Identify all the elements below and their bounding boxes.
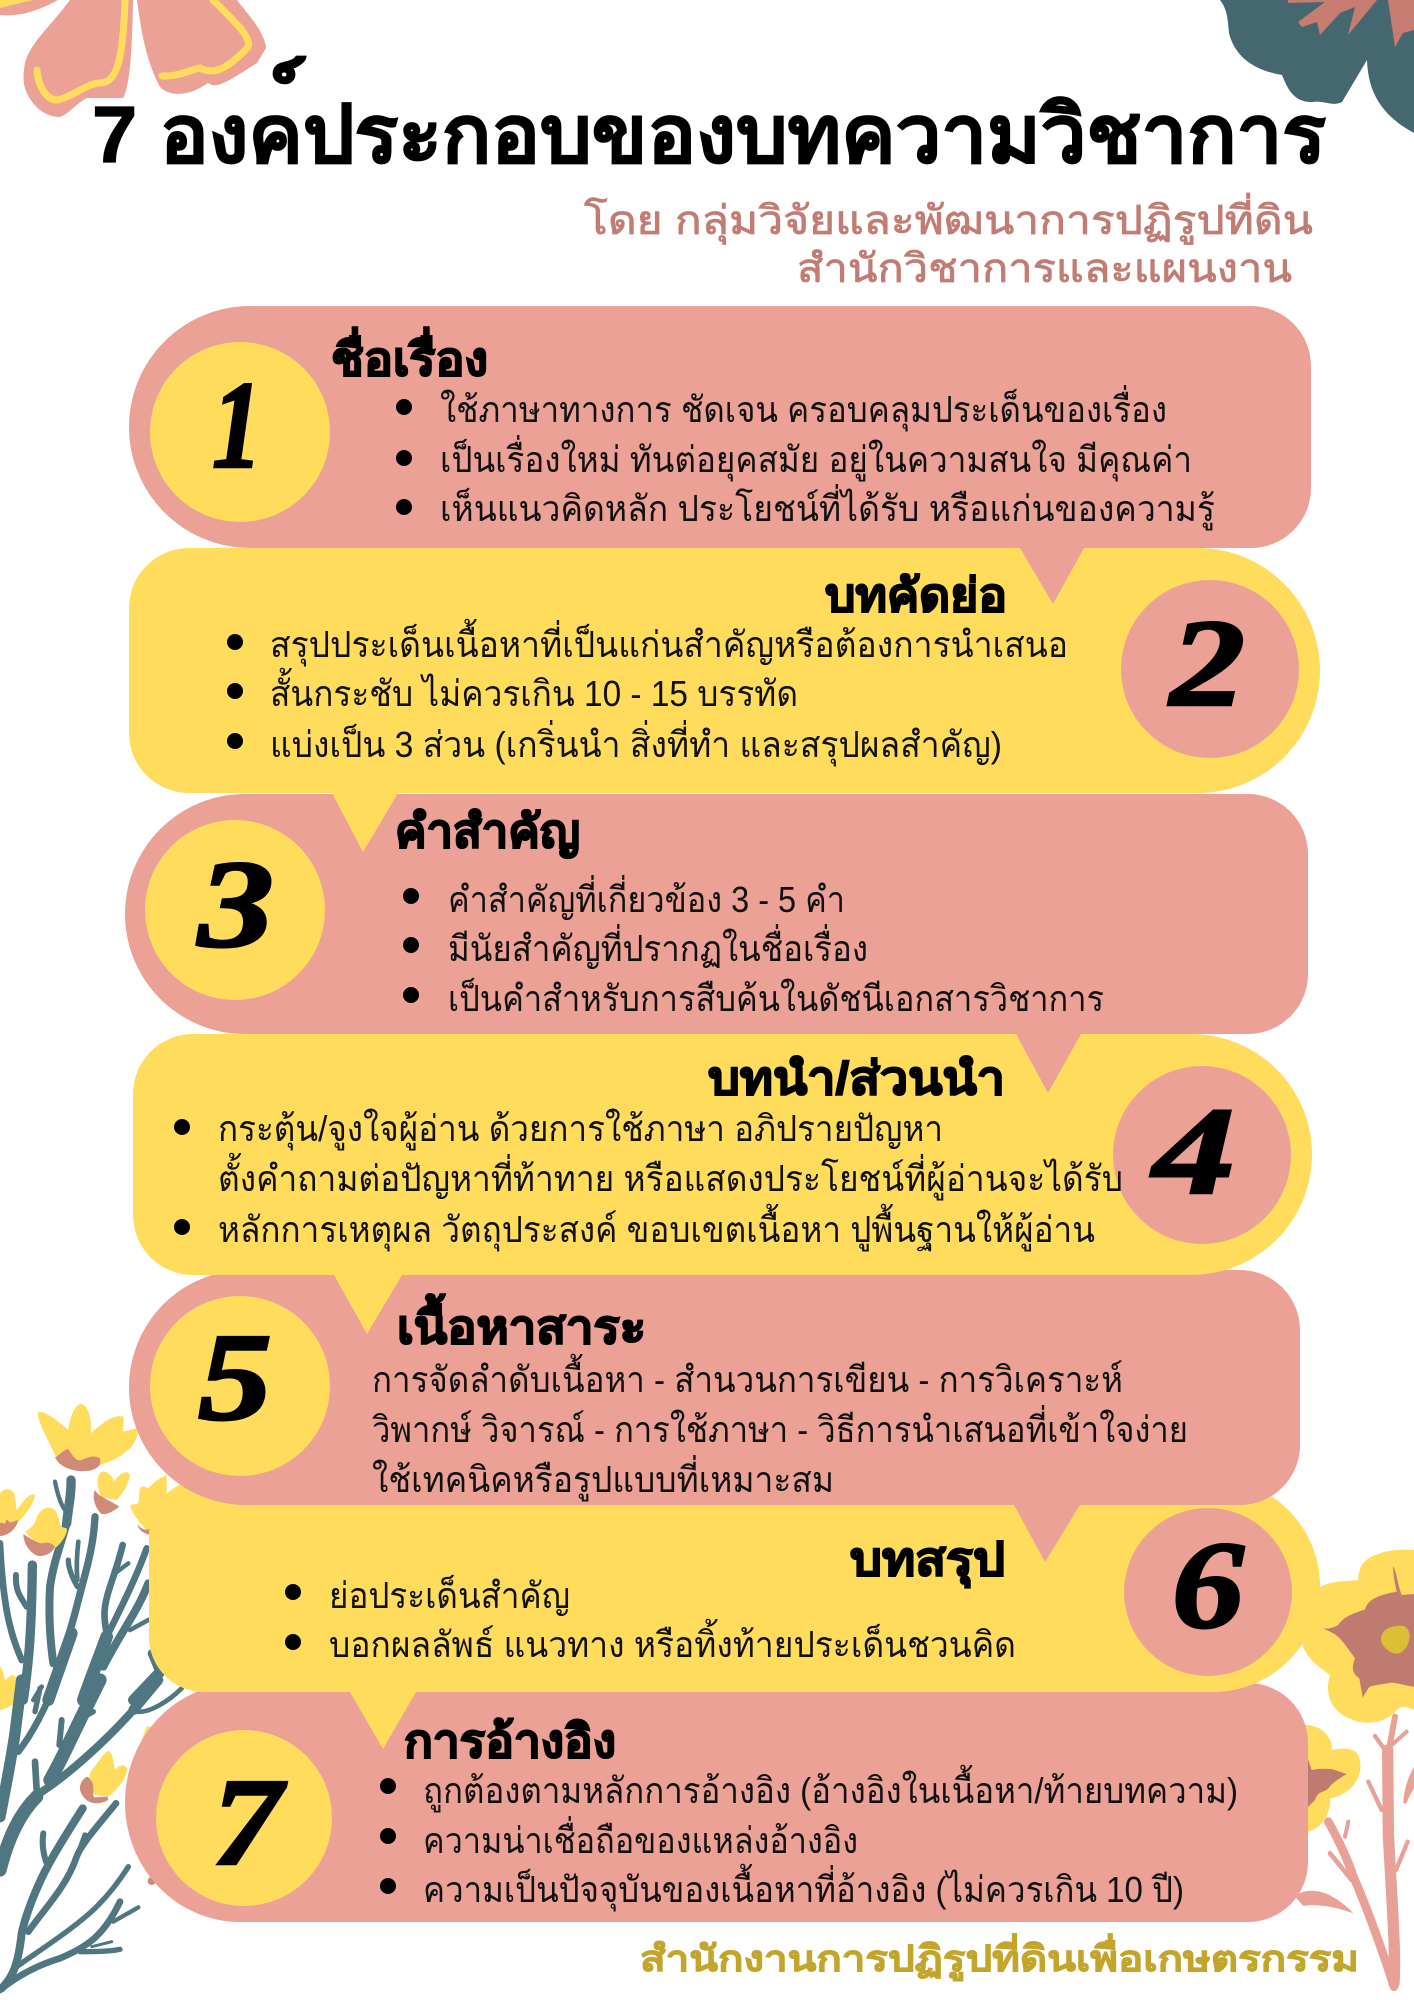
footer: organisation name: สำนักงานการปฏิรูปที่ดินเพื่อเกษตรกรรม [640, 1933, 1359, 1982]
decoration: top-right flower [1220, 0, 1414, 133]
panel 2: abstract: 2 [1168, 595, 1245, 733]
panel 7: references: 7 [212, 1754, 287, 1892]
panel 5: body content [129, 1270, 1300, 1562]
subtitle: organisation credit [584, 193, 1313, 291]
panel 5: body content: การจัดลำดับเนื้อหา - สำนวนการเขียน - การวิเคราะห์ [372, 1353, 1123, 1400]
panel 7: references [125, 1683, 1308, 1922]
decoration: bottom-right yellow flowers and pink branches [1295, 1550, 1414, 1987]
title: ประกอบของบทความวิชาการ [303, 90, 1326, 179]
decoration: bottom-left teal branches and yellow flowers [0, 1404, 182, 1990]
panel 7: references: ความเป็นปัจจุบันของเนื้อหาที่อ้างอิง (ไม่ควรเกิน 10 ปี) [423, 1863, 1184, 1912]
panel 3: keywords: คำสำคัญที่เกี่ยวข้อง 3 - 5 คำ [448, 875, 845, 920]
panel 3: keywords: เป็นคำสำหรับการสืบค้นในดัชนีเอกสารวิชาการ [448, 976, 1104, 1019]
panel 7: references: การอ้างอิง [404, 1715, 616, 1767]
decoration: top-left flower [0, 0, 266, 117]
panel 4: introduction: ตั้งคำถามต่อปัญหาที่ท้าทาย หรือแสดงประโยชน์ที่ผู้อ่านจะได้รับ [218, 1152, 1123, 1201]
panel 3: keywords: คำสำคัญ [395, 805, 580, 858]
panel 6: conclusion: 6 [1172, 1517, 1245, 1655]
subtitle: organisation credit: สำนักวิชาการและแผนงาน [797, 247, 1292, 291]
panel 5: body content: 5 [198, 1309, 272, 1447]
panel 2: abstract: แบ่งเป็น 3 ส่วน (เกริ่นนำ สิ่งที่ทำ และสรุปผลสำคัญ) [270, 720, 1002, 767]
title: 7 องค [92, 90, 299, 179]
panel 6: conclusion: ย่อประเด็นสำคัญ [329, 1573, 570, 1616]
panel 2: abstract: บทคัดย่อ [825, 569, 1007, 621]
panel 3: keywords: 3 [197, 836, 274, 974]
panel 1: title of the article: เป็นเรื่องใหม่ ทันต่อยุคสมัย อยู่ในความสนใจ มีคุณค่า [440, 435, 1192, 482]
panel 7: references: ถูกต้องตามหลักการอ้างอิง (อ้างอิงในเนื้อหา/ท้ายบทความ) [423, 1764, 1238, 1813]
panel 6: conclusion: บทสรุป [850, 1533, 1005, 1588]
panel 6: conclusion [149, 1479, 1320, 1749]
panel 2: abstract: สรุปประเด็นเนื้อหาที่เป็นแก่นสำคัญหรือต้องการนำเสนอ [270, 618, 1068, 667]
panel 2: abstract: สั้นกระชับ ไม่ควรเกิน 10 - 15 บรรทัด [270, 667, 798, 714]
title [92, 55, 1326, 179]
title: ์ [272, 55, 307, 84]
panel 1: title of the article: เห็นแนวคิดหลัก ประโยชน์ที่ได้รับ หรือแก่นของความรู้ [440, 484, 1215, 531]
panel 5: body content: วิพากษ์ วิจารณ์ - การใช้ภาษา - วิธีการนำเสนอที่เข้าใจง่าย [372, 1405, 1188, 1450]
panel 1: title of the article: 1 [212, 357, 262, 495]
panel 3: keywords [125, 794, 1308, 1093]
panel 3: keywords: มีนัยสำคัญที่ปรากฏในชื่อเรื่อง [448, 924, 868, 969]
panel 4: introduction: บทนำ/ส่วนนำ [708, 1052, 1005, 1104]
panel 4: introduction: 4 [1150, 1083, 1235, 1221]
panel 1: title of the article: ใช้ภาษาทางการ ชัดเจน ครอบคลุมประเด็นของเรื่อง [440, 385, 1167, 432]
panel 4: introduction [133, 1034, 1312, 1334]
panel 6: conclusion: บอกผลลัพธ์ แนวทาง หรือทิ้งท้ายประเด็นชวนคิด [329, 1618, 1016, 1665]
panel 4: introduction: กระตุ้น/จูงใจผู้อ่าน ด้วยการใช้ภาษา อภิปรายปัญหา [218, 1108, 943, 1151]
panel 4: introduction: หลักการเหตุผล วัตถุประสงค์ ขอบเขตเนื้อหา ปูพื้นฐานให้ผู้อ่าน [218, 1203, 1095, 1252]
panel 5: body content: เนื้อหาสาระ [397, 1293, 646, 1353]
panel 1: title of the article: ชื่อเรื่อง [331, 327, 488, 385]
panel 1: title of the article [129, 306, 1311, 604]
panel 5: body content: ใช้เทคนิคหรือรูปแบบที่เหมาะสม [372, 1455, 834, 1502]
panel 2: abstract [129, 548, 1320, 852]
panel 7: references: ความน่าเชื่อถือของแหล่งอ้างอิง [423, 1816, 858, 1861]
subtitle: organisation credit: โดย กลุ่มวิจัยและพัฒนาการปฏิรูปที่ดิน [584, 193, 1313, 245]
